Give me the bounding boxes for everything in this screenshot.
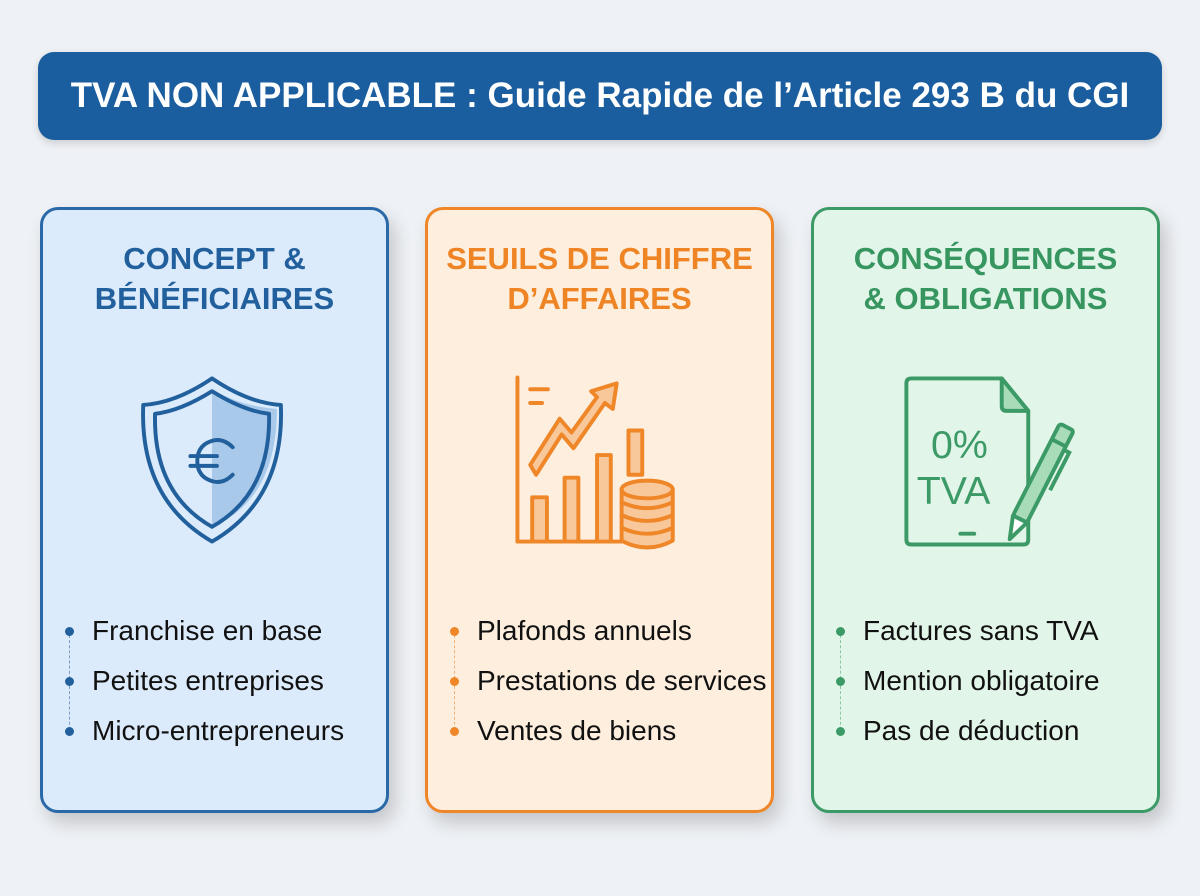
title: TVA NON APPLICABLE : Guide Rapide de l’Article 293 B du CGI	[71, 76, 1129, 115]
panel: concept	[40, 207, 389, 813]
heading: seuils: SEUILS DE CHIFFRE	[446, 241, 753, 276]
list: concept: Petites entreprises	[92, 665, 324, 696]
icon: document 0% TVA with pen: TVA	[917, 469, 991, 513]
heading: seuils	[446, 241, 753, 316]
heading: concept	[95, 241, 334, 316]
heading: seuils: D’AFFAIRES	[507, 281, 692, 316]
icon: document 0% TVA with pen	[904, 376, 1075, 546]
heading: concept: BÉNÉFICIAIRES	[95, 281, 334, 316]
icon: chart coins	[515, 376, 675, 550]
list: concept: Franchise en base	[92, 615, 322, 646]
list: seuils: Plafonds annuels	[477, 615, 692, 646]
panel: consequences	[811, 207, 1160, 813]
list: consequences: Factures sans TVA	[863, 615, 1098, 646]
heading: concept: CONCEPT &	[123, 241, 306, 276]
heading: consequences	[854, 241, 1117, 316]
list: seuils: Ventes de biens	[477, 715, 676, 746]
list: consequences: Mention obligatoire	[863, 665, 1100, 696]
heading: consequences: & OBLIGATIONS	[864, 281, 1107, 316]
title	[38, 52, 1162, 140]
list: concept	[65, 615, 344, 746]
list: consequences: Pas de déduction	[863, 715, 1079, 746]
list: seuils: Prestations de services	[477, 665, 766, 696]
icon: document 0% TVA with pen: 0%	[931, 423, 988, 467]
panel: seuils	[425, 207, 774, 813]
list: concept: Micro-entrepreneurs	[92, 715, 344, 746]
icon: shield euro	[141, 376, 283, 544]
list: consequences	[836, 615, 1100, 746]
heading: consequences: CONSÉQUENCES	[854, 241, 1117, 276]
list: seuils	[450, 615, 766, 746]
